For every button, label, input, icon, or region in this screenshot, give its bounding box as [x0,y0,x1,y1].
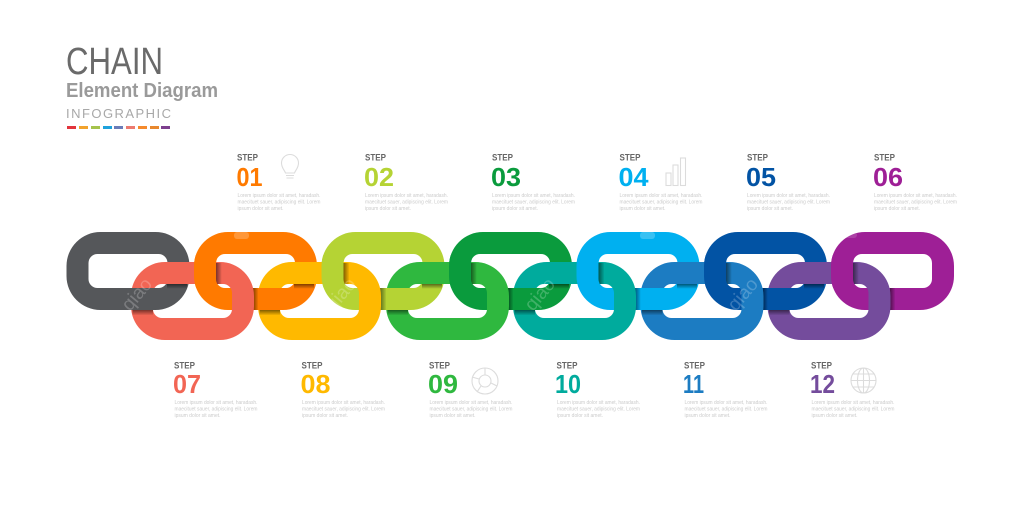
step 08: STEP [302,360,322,370]
step 10: STEP [556,360,578,370]
step 09: 09 [428,369,458,399]
lower link: teal [513,262,636,340]
upper link: grey [66,232,190,310]
shadows cast on lower links [132,263,858,315]
step 09: maecituet sauer, adipiscing elit. Lorem [430,406,512,412]
upper link: magenta [831,232,954,310]
step 04: 04 [618,162,649,192]
step 06: ipsum dolor sit amet. [874,206,920,212]
step 06: 06 [873,162,903,192]
upper link: navy [704,232,827,310]
watermarks: qiao [322,274,361,315]
icon: donut chart [472,368,498,394]
step 01: ipsum dolor sit amet. [238,206,284,212]
step 03: ipsum dolor sit amet. [492,206,538,212]
step 07: STEP [174,360,195,370]
step 04: ipsum dolor sit amet. [620,206,666,212]
step 02 [364,152,448,212]
step 07: maecituet sauer, adipiscing elit. Lorem [174,406,258,412]
title: CHAIN: CHAIN [66,41,163,83]
step 11: maecituet sauer, adipiscing elit. Lorem [684,406,768,412]
step 03: STEP [492,152,513,162]
lower link: yellow [258,262,381,340]
step 05: Lorem ipsum dolor sit amet, haradash. [747,193,830,199]
step 05 [746,152,830,212]
step 01: STEP [237,152,258,162]
step 06 [873,152,957,212]
watermarks: qiao [521,274,560,315]
lower link: blue [640,262,764,340]
step 06: STEP [874,152,895,162]
icon: light bulb [282,154,298,178]
step 01: maecituet sauer, adipiscing elit. Lorem [238,200,320,206]
step 06: Lorem ipsum dolor sit amet, haradash. [874,193,957,199]
colour dash row [67,126,170,129]
shadows cast on upper links [167,284,895,310]
upper link: orange [194,232,317,310]
step 09: ipsum dolor sit amet. [430,413,476,419]
step 06: maecituet sauer, adipiscing elit. Lorem [874,200,957,206]
interlocking overlaps of upper links [131,255,854,310]
step 07: 07 [173,369,201,399]
step 04 [618,152,702,212]
step 03 [491,152,575,212]
subtitle: Element Diagram: Element Diagram [66,80,218,102]
step 02: STEP [365,152,386,162]
step 08: Lorem ipsum dolor sit amet, haradash. [302,400,385,406]
subtitle: INFOGRAPHIC: INFOGRAPHIC [66,106,171,121]
step 10: ipsum dolor sit amet. [557,413,603,419]
step 04: STEP [620,152,640,162]
step 08 [300,360,385,419]
step 07: ipsum dolor sit amet. [174,413,220,419]
step 01: 01 [236,162,262,192]
title block [66,41,218,129]
step 05: 05 [746,162,776,192]
step 10: maecituet sauer, adipiscing elit. Lorem [557,406,640,412]
icon: bar chart [666,158,686,186]
icon: globe [851,368,876,393]
step 07: Lorem ipsum dolor sit amet, haradash. [174,400,258,406]
step 12: Lorem ipsum dolor sit amet, haradash. [812,400,894,406]
step 11: Lorem ipsum dolor sit amet, haradash. [684,400,768,406]
step 02: Lorem ipsum dolor sit amet, haradash. [365,193,448,199]
step 11: STEP [684,360,705,370]
step 03: maecituet sauer, adipiscing elit. Lorem [492,200,575,206]
step 12: STEP [811,360,832,370]
step 05: ipsum dolor sit amet. [747,206,793,212]
step 02: 02 [364,162,394,192]
step 07 [173,360,258,419]
watermarks: qiao [724,274,763,315]
step 11: 11 [683,369,704,399]
upper link: sky blue [576,232,700,310]
chain diagram [66,232,954,340]
step 09: STEP [429,360,450,370]
upper link: lime [322,232,444,310]
step 12: ipsum dolor sit amet. [812,413,858,419]
lower link: purple [768,262,890,340]
step 10 [555,360,640,419]
step 10: 10 [555,369,581,399]
step 08: 08 [300,369,330,399]
step 11: ipsum dolor sit amet. [684,413,730,419]
step 11 [683,360,768,419]
step 05: maecituet sauer, adipiscing elit. Lorem [747,200,830,206]
step 02: ipsum dolor sit amet. [365,206,411,212]
upper link: green [449,232,572,310]
step 04: Lorem ipsum dolor sit amet, haradash. [620,193,702,199]
lower link: bright green [386,262,509,340]
lower link: coral [131,262,254,340]
step 08: maecituet sauer, adipiscing elit. Lorem [302,406,385,412]
step 03: 03 [491,162,521,192]
step 01: Lorem ipsum dolor sit amet, haradash. [238,193,320,199]
step 12: maecituet sauer, adipiscing elit. Lorem [812,406,894,412]
watermarks: qiao [118,274,157,315]
step 12 [810,360,894,419]
step 09 [428,360,512,419]
step 12: 12 [810,369,835,399]
step 01 [236,152,320,212]
step 05: STEP [747,152,768,162]
step 10: Lorem ipsum dolor sit amet, haradash. [557,400,640,406]
step 02: maecituet sauer, adipiscing elit. Lorem [365,200,448,206]
step 04: maecituet sauer, adipiscing elit. Lorem [620,200,702,206]
step 09: Lorem ipsum dolor sit amet, haradash. [430,400,512,406]
step 03: Lorem ipsum dolor sit amet, haradash. [492,193,575,199]
step 08: ipsum dolor sit amet. [302,413,348,419]
watermarks [118,232,857,315]
